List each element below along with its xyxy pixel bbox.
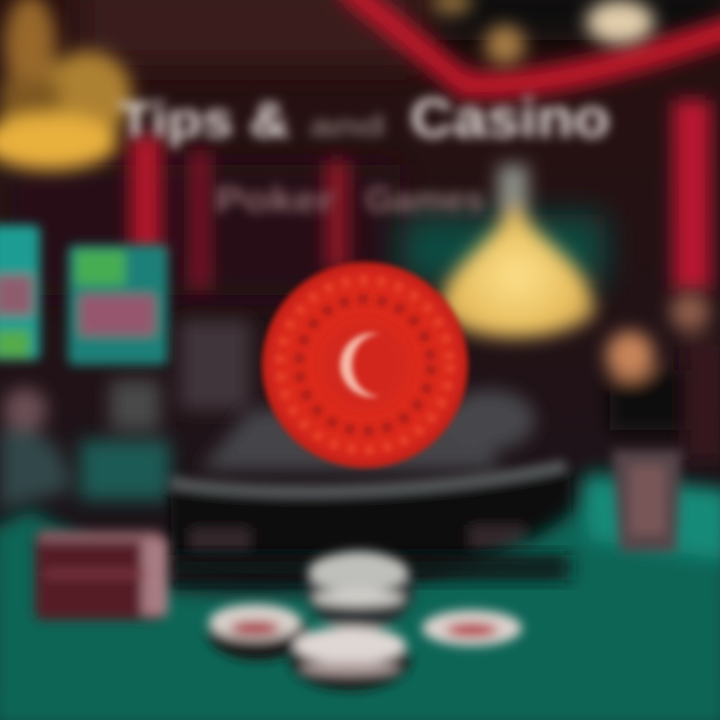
chandelier left (0, 0, 132, 170)
red ribbon top right (350, 0, 720, 86)
chandelier center (438, 165, 595, 338)
green back wall panel (400, 215, 605, 285)
subheading text: Games (365, 179, 485, 220)
pedestal (170, 465, 572, 577)
chip emblem (340, 333, 380, 397)
slot machine right (68, 245, 168, 365)
red casino chip (262, 262, 468, 468)
base behind chip (200, 390, 535, 470)
ceiling lights (432, 0, 654, 65)
shadow at table edge (170, 555, 570, 580)
people on right (606, 292, 720, 460)
grey side panels (0, 320, 250, 510)
subheading text (215, 179, 485, 220)
slot machine left (0, 225, 40, 360)
heading text: Casino (410, 86, 610, 149)
subheading text: Poker (215, 179, 335, 220)
green felt table (0, 470, 720, 720)
red curtains (130, 100, 711, 290)
stack of chips left (35, 530, 168, 620)
heading text (118, 86, 610, 149)
poker chips bottom center (208, 550, 522, 690)
heading text: and (310, 110, 385, 143)
heading text: Tips & (118, 92, 290, 148)
ceiling (0, 0, 720, 295)
cup on right (612, 450, 682, 552)
